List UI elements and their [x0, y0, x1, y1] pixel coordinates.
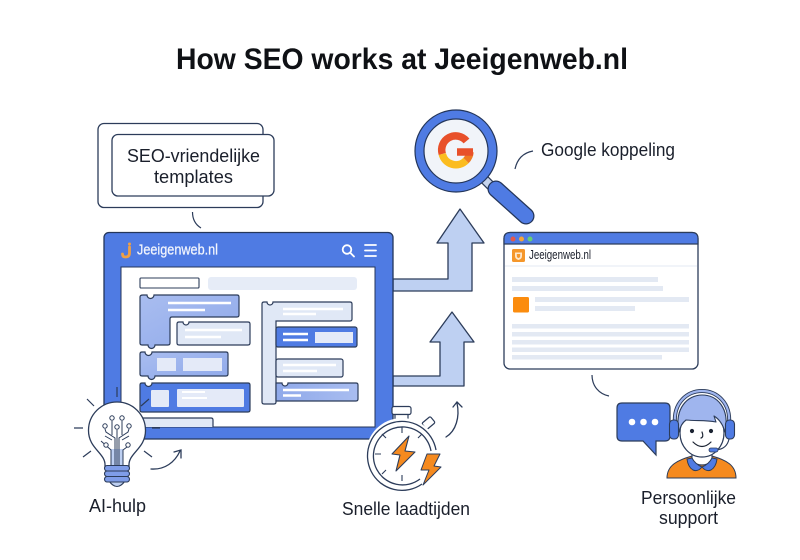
card: SEO-vriendelijke templates: templates — [154, 166, 233, 187]
site name: Jeeigenweb.nl — [529, 247, 591, 262]
block: right column stack — [262, 302, 358, 404]
eyes, nose and smile — [690, 430, 712, 446]
browser frame — [104, 232, 393, 439]
orange thumbnail — [513, 297, 529, 312]
connector: card to browser — [192, 212, 201, 228]
card: SEO-vriendelijke templates — [98, 124, 274, 208]
connector: results to support — [592, 375, 609, 396]
icon: light bulb — [74, 387, 160, 486]
face — [680, 409, 724, 457]
site favicon — [512, 249, 525, 262]
panel: website builder browser — [104, 232, 393, 439]
Google G mark — [442, 136, 473, 165]
connector: Google label — [515, 151, 533, 169]
headset band — [675, 391, 729, 424]
neck — [692, 448, 712, 465]
browser logo and name: Jeeigenweb.nl — [137, 242, 218, 258]
ear cups — [670, 420, 678, 439]
arrow: lower growth arrow — [393, 312, 474, 386]
title: How SEO works at Jeeigenweb.nl — [176, 43, 628, 76]
collar — [687, 458, 717, 471]
icon: search — [343, 245, 354, 256]
arrow: bulb to builder — [151, 450, 181, 469]
browser title bar — [504, 232, 698, 244]
icon: chat bubble — [617, 403, 670, 455]
block: two-field block — [140, 352, 228, 380]
card: SEO-vriendelijke templates: SEO-vriendelijke — [127, 145, 260, 166]
block: dark blue block — [140, 383, 250, 412]
label: Google koppeling: Google koppeling — [541, 140, 675, 160]
panel: search result browser — [504, 232, 698, 369]
arrow: upper growth arrow — [393, 209, 484, 291]
browser canvas — [121, 267, 375, 427]
label: Persoonlijke support: support — [659, 508, 718, 528]
block: pale nested block — [177, 322, 250, 345]
icon: stopwatch — [366, 406, 441, 490]
arrow: stopwatch to lower growth arrow — [446, 402, 462, 437]
label: Persoonlijke support: Persoonlijke — [641, 488, 736, 508]
label: Persoonlijke support — [641, 488, 736, 528]
shoulders — [667, 456, 736, 478]
block: light-blue L block — [140, 295, 239, 349]
icon: magnifier with Google G — [415, 110, 526, 216]
label: Snelle laadtijden: Snelle laadtijden — [342, 499, 470, 519]
icon: support agent — [667, 391, 736, 478]
block: cut-off bottom block — [140, 418, 213, 427]
toolbar — [140, 277, 357, 290]
label: AI-hulp: AI-hulp — [89, 495, 146, 516]
divider and result bars — [505, 266, 697, 360]
hair — [678, 395, 726, 432]
microphone — [709, 439, 729, 452]
icon: menu — [365, 245, 376, 256]
window dots — [510, 236, 532, 242]
